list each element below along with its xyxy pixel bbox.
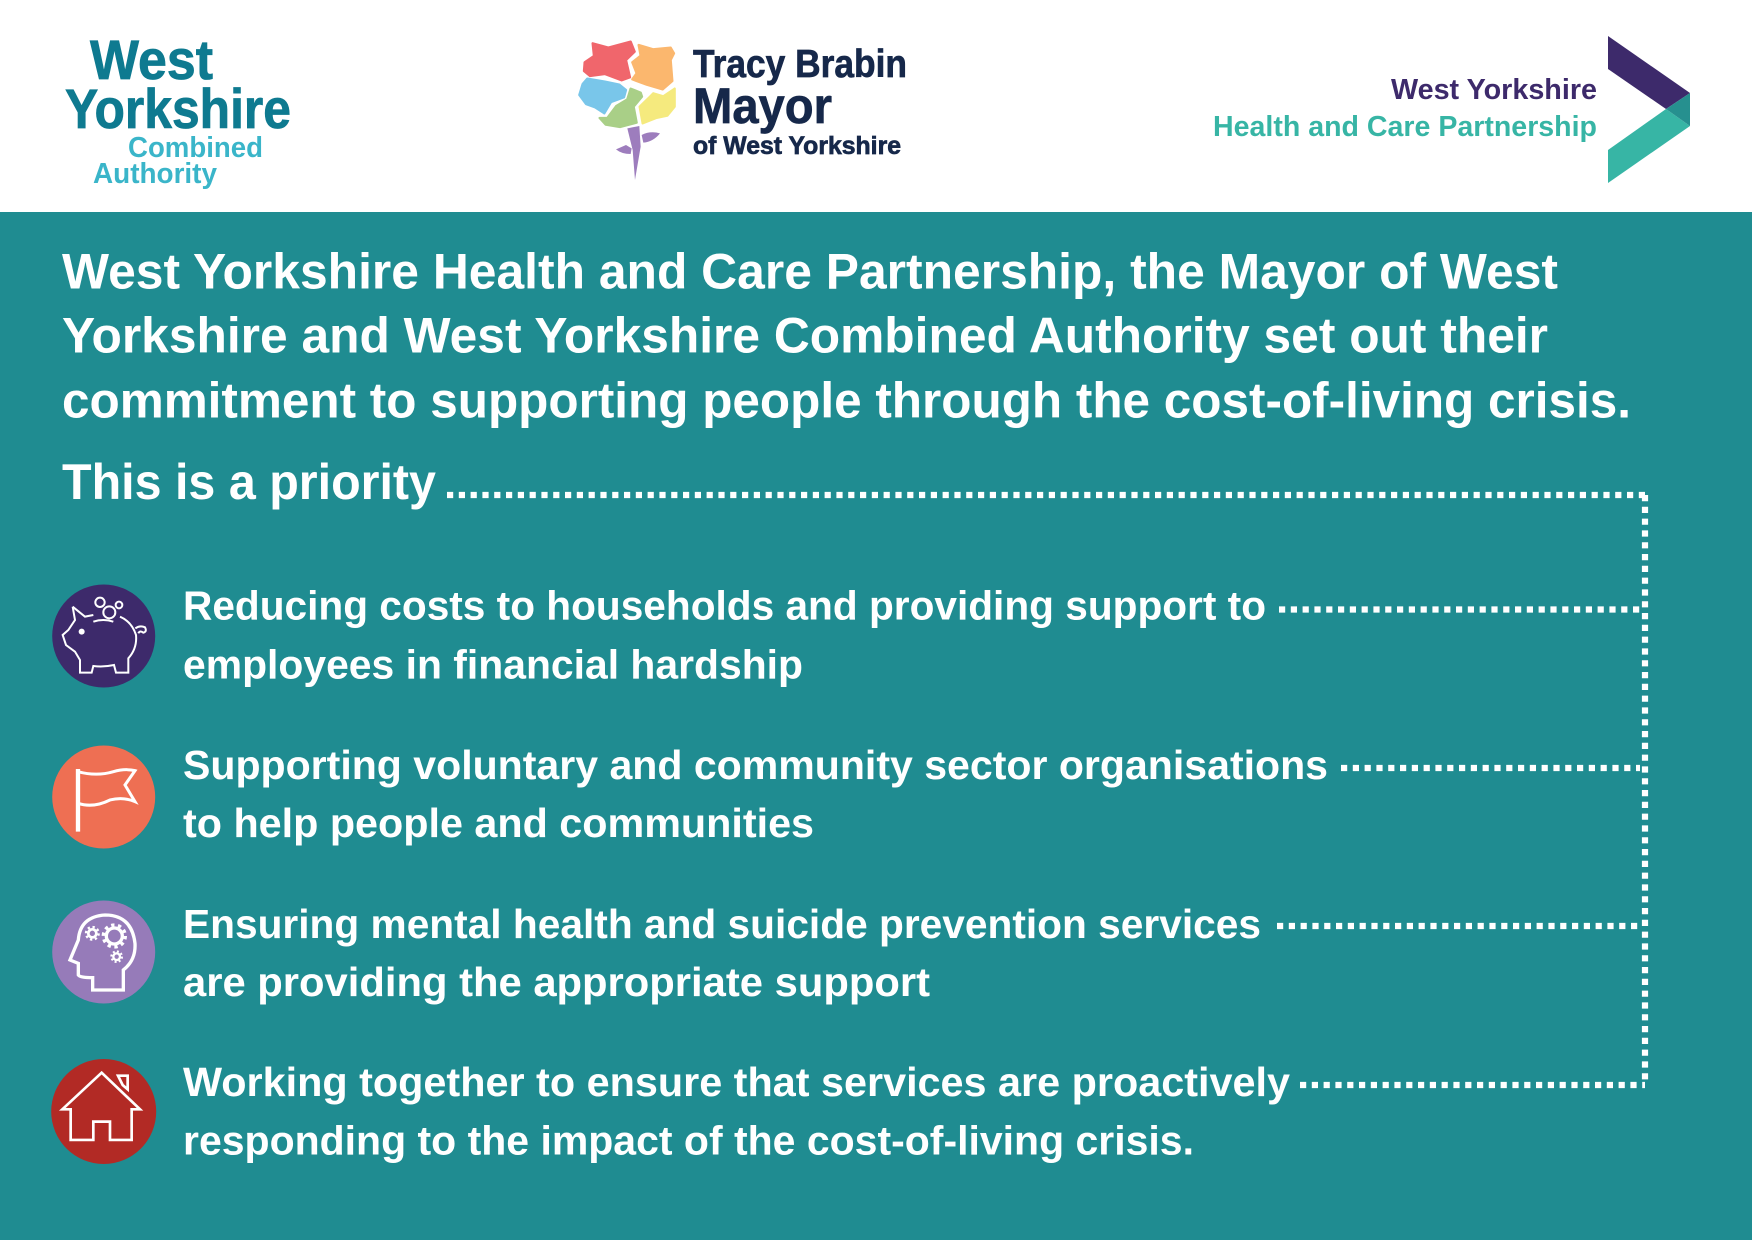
heading: commitment statement bbox=[62, 244, 1631, 428]
logo: West Yorkshire Combined Authority: Authority bbox=[93, 158, 217, 190]
text: priority 3: are providing the appropriate support bbox=[183, 959, 930, 1005]
text: priority 1: Reducing costs to households and providing support to bbox=[183, 582, 1266, 628]
heading: commitment statement: Yorkshire and West Yorkshire Combined Authority set out their bbox=[62, 308, 1548, 364]
icon: house bbox=[51, 1059, 156, 1164]
logo: Tracy Brabin Mayor of West Yorkshire: of West Yorkshire bbox=[693, 132, 901, 160]
connector: dotted bracket linking priorities bbox=[447, 495, 1645, 1085]
heading: commitment statement: commitment to supporting people through the cost-of-living crisis. bbox=[62, 372, 1631, 428]
text: priority 2 bbox=[183, 742, 1328, 846]
icon: flag bbox=[52, 746, 155, 848]
text: priority 4: responding to the impact of the cost-of-living crisis. bbox=[183, 1118, 1194, 1164]
subheading: this is a priority: This is a priority bbox=[62, 454, 436, 510]
text: priority 3 bbox=[183, 901, 1261, 1005]
text: priority 4 bbox=[183, 1059, 1290, 1164]
icon: head with gears bbox=[52, 900, 155, 1004]
logo: West Yorkshire Health and Care Partnership text bbox=[1213, 74, 1597, 143]
text: priority 4: Working together to ensure that services are proactively bbox=[183, 1059, 1290, 1105]
logo: West Yorkshire Combined Authority: Yorkshire bbox=[65, 77, 291, 140]
logo: Tracy Brabin Mayor of West Yorkshire: Tracy Brabin bbox=[693, 43, 907, 86]
logo: West Yorkshire Combined Authority bbox=[65, 28, 291, 190]
logo: West Yorkshire Combined Authority: Combined bbox=[128, 132, 263, 164]
text: priority 1: employees in financial hardship bbox=[183, 642, 803, 688]
logo: Tracy Brabin Mayor of West Yorkshire: Mayor bbox=[693, 78, 832, 134]
heading: commitment statement: West Yorkshire Health and Care Partnership, the Mayor of West bbox=[62, 244, 1558, 300]
icon: piggy bank bbox=[52, 584, 155, 688]
logo: West Yorkshire Combined Authority: West bbox=[90, 28, 213, 91]
text: priority 3: Ensuring mental health and suicide prevention services bbox=[183, 901, 1261, 947]
text: priority 2: to help people and communities bbox=[183, 800, 814, 846]
logo: West Yorkshire Health and Care Partnership text: Health and Care Partnership bbox=[1213, 111, 1597, 143]
logo: Tracy Brabin Mayor of West Yorkshire bbox=[693, 43, 907, 160]
text: priority 2: Supporting voluntary and community sector organisations bbox=[183, 742, 1328, 788]
logo: West Yorkshire Health and Care Partnership text: West Yorkshire bbox=[1391, 74, 1597, 106]
logo: Mayor flower emblem bbox=[579, 42, 675, 180]
logo: partnership chevron bbox=[1608, 36, 1690, 183]
text: priority 1 bbox=[183, 582, 1266, 688]
